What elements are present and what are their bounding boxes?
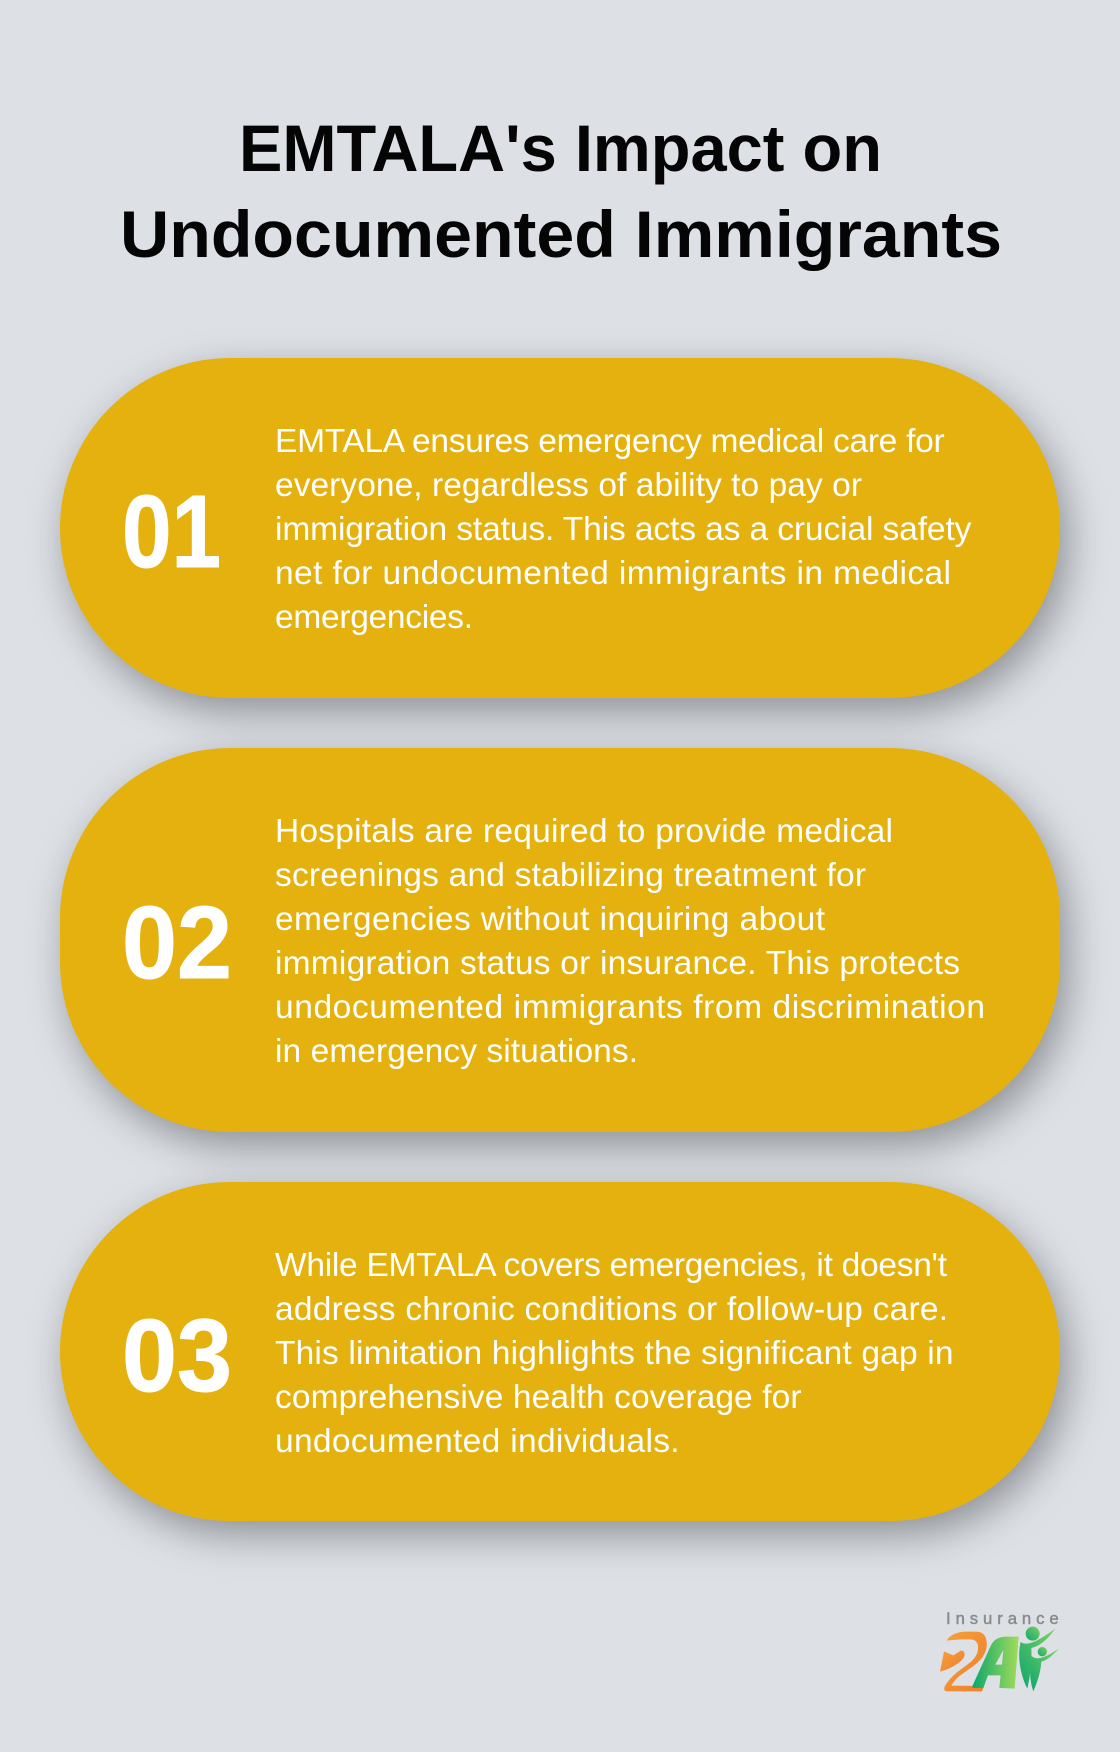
panel: card 01 — [60, 358, 1060, 698]
text: card 03 description: While EMTALA covers emergencies, it doesn't — [275, 1247, 948, 1284]
number 01: 01 — [122, 474, 221, 589]
text: card 02 description: Hospitals are required to provide medical — [275, 813, 893, 850]
number 03: 03 — [122, 1298, 232, 1413]
text: card 02 description — [275, 813, 985, 1070]
title: EMTALA's Impact on — [239, 111, 882, 185]
panel: card 02 — [60, 748, 1060, 1132]
logo: Insurance 2Ai — [940, 1609, 1059, 1692]
text: card 01 description: immigration status. This acts as a crucial safety — [275, 511, 972, 548]
text: card 03 description: comprehensive health coverage for — [275, 1379, 802, 1416]
text: card 01 description: net for undocumented immigrants in medical — [275, 555, 951, 592]
title — [120, 111, 1002, 271]
text: card 02 description: immigration status or insurance. This protects — [275, 945, 960, 982]
logo numeral 2 — [944, 1632, 987, 1691]
title: Undocumented Immigrants — [120, 197, 1002, 271]
text: card 02 description: emergencies without inquiring about — [275, 901, 826, 938]
logo letter A — [972, 1637, 1019, 1689]
text: card 01 description — [275, 423, 972, 636]
logo wordmark: Insurance — [946, 1609, 1059, 1628]
text: card 03 description — [275, 1247, 954, 1460]
text: card 02 description: screenings and stabilizing treatment for — [275, 857, 866, 894]
text: card 03 description: This limitation highlights the significant gap in — [275, 1335, 954, 1372]
text: card 03 description: address chronic conditions or follow-up care. — [275, 1291, 948, 1328]
text: card 01 description: EMTALA ensures emergency medical care for — [275, 423, 945, 460]
logo person small — [1030, 1647, 1059, 1691]
logo person large — [1019, 1627, 1055, 1689]
number 02: 02 — [122, 885, 232, 1000]
text: card 01 description: everyone, regardless of ability to pay or — [275, 467, 862, 504]
text: card 02 description: undocumented immigrants from discrimination — [275, 989, 985, 1026]
panel: card 03 — [60, 1182, 1060, 1521]
text: card 01 description: emergencies. — [275, 599, 473, 636]
text: card 02 description: in emergency situations. — [275, 1033, 638, 1070]
text: card 03 description: undocumented individuals. — [275, 1423, 680, 1460]
logo heart — [940, 1651, 965, 1672]
